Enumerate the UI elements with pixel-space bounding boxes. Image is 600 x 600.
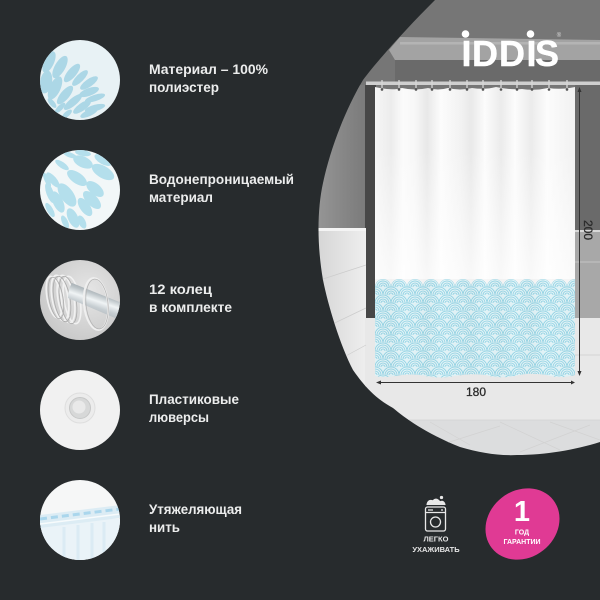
- warranty badge: 1: [514, 496, 530, 528]
- width dimension: 180: [466, 385, 486, 399]
- warranty badge: [471, 474, 574, 574]
- feature text 5: нить: [149, 520, 180, 535]
- feature text 4: Пластиковые: [149, 392, 239, 407]
- brand logo: I: [462, 33, 472, 74]
- floor: [408, 420, 600, 456]
- left wall: [318, 85, 366, 228]
- brand logo: I: [526, 33, 537, 74]
- brand logo: D: [499, 33, 525, 74]
- feature text 1: полиэстер: [149, 80, 219, 95]
- warranty badge: ГОД: [515, 530, 529, 536]
- feature text 3: 12 колец: [149, 282, 213, 297]
- curtain rings: [382, 80, 567, 88]
- easy care label: УХАЖИВАТЬ: [412, 545, 460, 554]
- width dimension: [376, 380, 575, 399]
- feature text 4: люверсы: [149, 410, 209, 425]
- feature 5: weighted thread: [40, 480, 120, 560]
- feature 4: plastic grommet: [40, 370, 120, 450]
- feature 3: rings on rod: [40, 260, 122, 340]
- feature text 5: Утяжеляющая: [149, 502, 242, 517]
- cornice: [389, 37, 600, 60]
- curtain rod: [366, 82, 600, 85]
- brand logo: D: [472, 33, 498, 74]
- wave pattern: [375, 279, 575, 379]
- height dimension: [578, 87, 595, 376]
- shower niche shadow: [365, 85, 376, 320]
- tiled wall: [318, 230, 366, 386]
- icon: washing machine: [426, 496, 446, 531]
- brand logo: S: [535, 33, 559, 74]
- feature text 2: Водонепроницаемый: [149, 172, 294, 187]
- brand logo: ®: [557, 32, 562, 39]
- warranty badge: ГАРАНТИИ: [503, 539, 541, 546]
- bathroom photo: [318, 0, 600, 460]
- curtain: [375, 85, 575, 380]
- brand logo: [462, 30, 562, 74]
- feature 1: material swatch: [38, 40, 120, 120]
- feature text 2: материал: [149, 190, 213, 205]
- feature 2: waterproof swatch: [40, 149, 120, 230]
- easy care label: ЛЕГКО: [424, 534, 449, 544]
- height dimension: 200: [581, 220, 595, 240]
- feature text 3: в комплекте: [149, 300, 232, 315]
- upper wall: [358, 0, 600, 90]
- feature text 1: Материал – 100%: [149, 62, 268, 77]
